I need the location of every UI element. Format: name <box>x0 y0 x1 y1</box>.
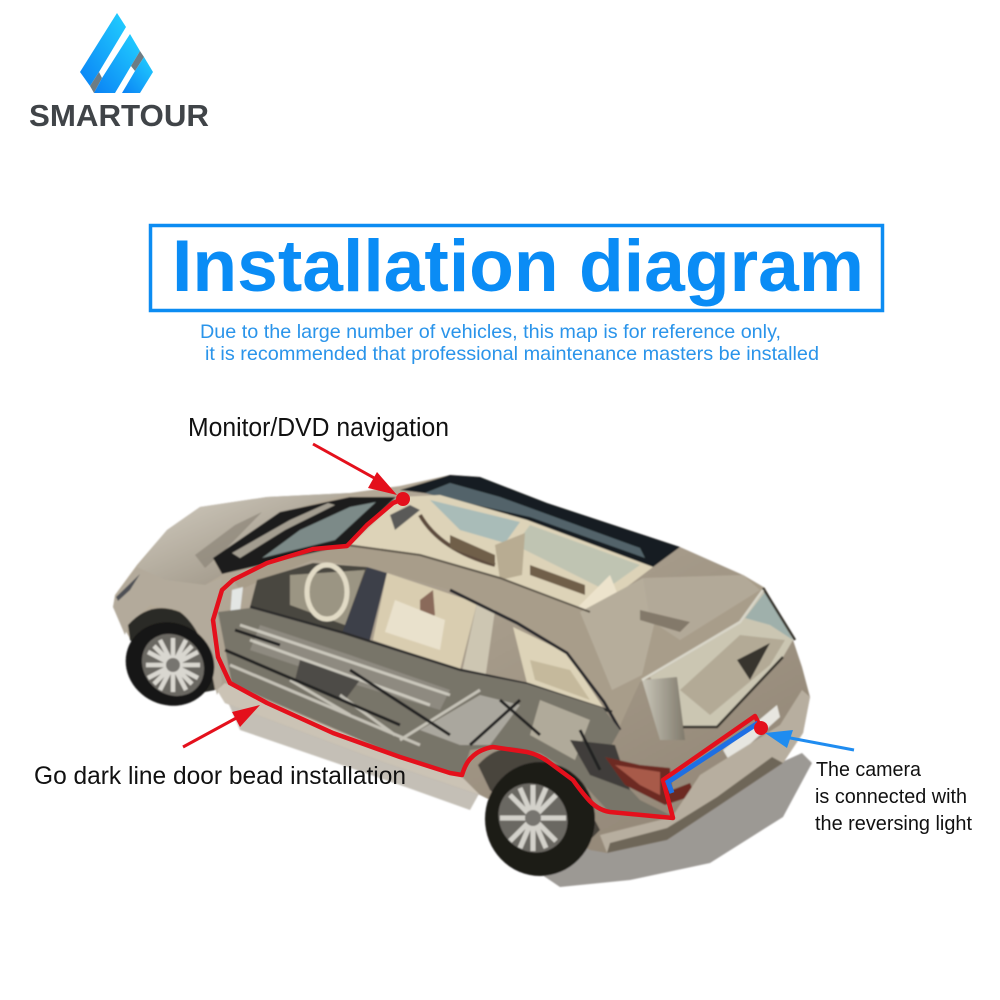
blue cable <box>668 723 758 793</box>
roof rail and rear quarter panel <box>233 545 765 730</box>
sill <box>217 683 480 795</box>
arrow: door bead <box>183 705 260 747</box>
label: camera: The camera <box>816 759 922 781</box>
label: door bead: Go dark line door bead installation <box>34 762 406 790</box>
steering wheel <box>307 565 347 619</box>
disclaimer text: it is recommended that professional maintenance masters be installed <box>205 343 819 365</box>
rear wheel <box>478 748 600 876</box>
front side window <box>230 563 367 633</box>
arrow: camera <box>765 730 854 750</box>
roof glass strip <box>400 475 680 567</box>
disclaimer text <box>200 321 819 365</box>
label: monitor: Monitor/DVD navigation <box>188 414 449 442</box>
car artwork <box>112 475 812 887</box>
license plate <box>723 705 780 762</box>
label: camera: the reversing light <box>815 813 972 835</box>
headlight <box>116 574 140 601</box>
front fender <box>113 567 222 695</box>
windshield <box>213 497 396 574</box>
front wheel <box>112 608 228 720</box>
logo: Smartour <box>29 13 209 133</box>
middle side window <box>373 573 477 670</box>
disclaimer text: Due to the large number of vehicles, this map is for reference only, <box>200 321 781 343</box>
label: camera <box>815 759 972 835</box>
interior seen through open roof <box>350 495 653 618</box>
title box: Installation diagram <box>172 226 864 307</box>
rear side window <box>513 627 603 707</box>
car illustration <box>112 475 812 887</box>
camera dot <box>754 721 768 735</box>
door cutaway mechanics <box>218 608 672 816</box>
arrow: monitor <box>313 444 397 495</box>
logo: Smartour: SMARTOUR <box>29 98 209 133</box>
label: camera: is connected with <box>815 786 967 808</box>
B pillar <box>342 567 387 640</box>
monitor connection dot <box>396 492 410 506</box>
car ground shadow <box>227 700 812 887</box>
rear bumper <box>600 690 810 853</box>
hood <box>137 493 350 585</box>
red cable route <box>213 499 761 818</box>
tail light <box>605 757 695 805</box>
car body <box>113 475 810 853</box>
rear window <box>642 588 795 740</box>
